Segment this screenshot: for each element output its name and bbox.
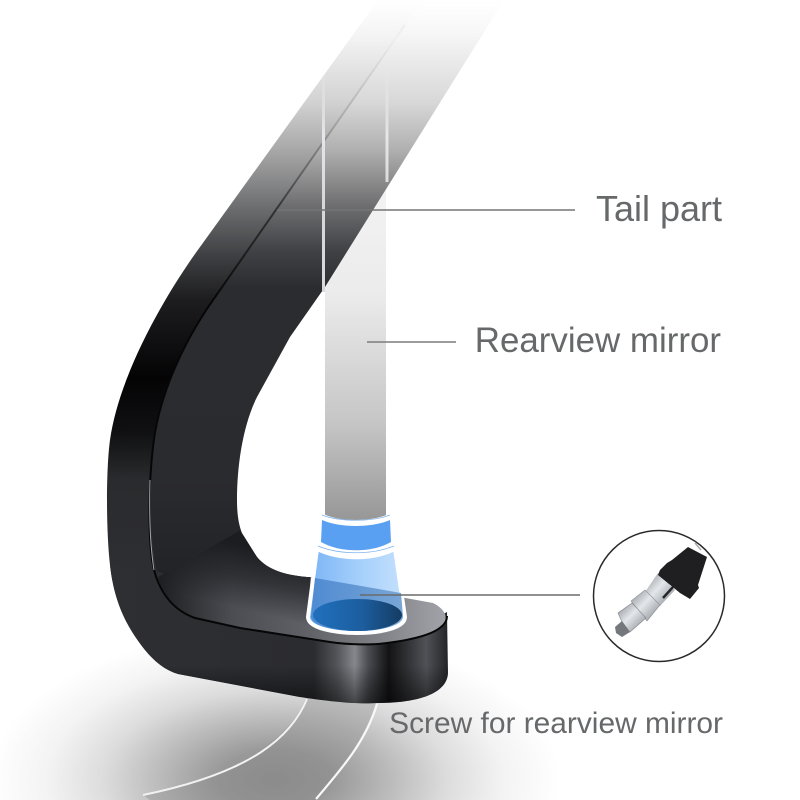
bracket (107, 0, 504, 703)
screw wire (695, 543, 701, 550)
foot side face (110, 565, 448, 703)
rod below bracket with white outlines (143, 695, 377, 800)
bracket outer side face (107, 0, 423, 697)
screw metal body (645, 573, 675, 606)
ground shadow (0, 620, 800, 800)
cone shaded lower part (311, 578, 403, 631)
rod outline lines over bracket (322, 70, 388, 292)
label: screw for rearview mirror: Screw for rearview mirror (389, 707, 723, 740)
socket cone (308, 549, 405, 633)
label: tail part: Tail part (596, 188, 722, 229)
screw inset circle (594, 530, 724, 662)
socket collar (321, 520, 391, 550)
blue socket (308, 515, 405, 633)
screw black cap (658, 547, 707, 599)
seam line (149, 25, 447, 644)
mirror rod (325, 175, 386, 520)
label: rearview mirror: Rearview mirror (475, 321, 721, 360)
seam highlight (150, 480, 154, 570)
socket hole (313, 599, 402, 631)
bracket front plate (150, 0, 504, 640)
leader line: rearview mirror (367, 341, 456, 343)
leader line: screw (360, 594, 580, 596)
foot top face (158, 530, 446, 644)
leader line: tail part (277, 209, 575, 211)
